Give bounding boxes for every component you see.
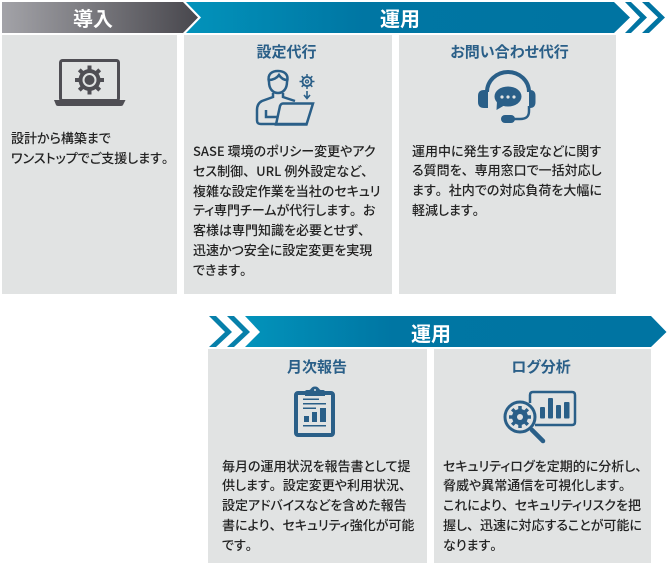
label: 運用 top: 運用 — [380, 3, 420, 32]
heading: 設定代行: 設定代行 — [256, 41, 316, 62]
icon: headset with speech bubble — [478, 70, 536, 123]
text: 設定代行 description: セス制御、URL 例外設定など、 — [193, 161, 374, 180]
text: 導入 description: ワンストップでご支援します。 — [11, 148, 175, 167]
panel: 設定代行 — [184, 35, 392, 294]
text: お問い合わせ代行 description: ます。社内での対応負荷を大幅に — [412, 180, 602, 199]
icon: magnifier with gear and chart — [504, 390, 576, 444]
icon: clipboard report — [294, 386, 335, 437]
heading: 月次報告: 月次報告 — [287, 356, 347, 377]
text: ログ分析 description: セキュリティログを定期的に分析し、 — [443, 456, 648, 474]
arrow: 運用 phase lower — [209, 316, 666, 347]
text: 月次報告 description: 設定アドバイスなどを含めた報告 — [222, 495, 407, 514]
text: 設定代行 description: できます。 — [193, 260, 253, 279]
text: 月次報告 description: 毎月の運用状況を報告書として提 — [222, 456, 411, 474]
text: 設定代行 description: SASE 環境のポリシー変更やアク — [193, 141, 376, 160]
text: ログ分析 description — [443, 456, 648, 554]
arrow: 導入 phase — [2, 2, 198, 33]
panel: 月次報告 — [208, 349, 427, 563]
icon: operator with laptop and gear — [256, 70, 315, 126]
label: 運用 lower: 運用 — [411, 318, 451, 347]
text: ログ分析 description: なります。 — [443, 535, 503, 554]
text: 設定代行 description: 迅速かつ安全に設定変更を実現 — [193, 240, 372, 259]
text: 設定代行 description: ティ専門チームが代行します。お — [193, 200, 375, 219]
text: 導入 description — [11, 128, 175, 167]
text: 設定代行 description: 客様は専門知識を必要とせず、 — [193, 220, 371, 239]
text: 導入 description: 設計から構築まで — [11, 128, 111, 147]
panel: お問い合わせ代行 — [399, 35, 616, 294]
text: 設定代行 description — [193, 141, 380, 279]
panel: ログ分析 — [434, 349, 651, 563]
text: 月次報告 description: 書により、セキュリティ強化が可能 — [222, 515, 414, 534]
text: 月次報告 description — [222, 456, 414, 554]
icon: laptop with gear — [54, 59, 126, 106]
arrow: 運用 phase top — [186, 2, 665, 33]
text: ログ分析 description: これにより、セキュリティリスクを把 — [443, 495, 641, 514]
text: 設定代行 description: 複雑な設定作業を当社のセキュリ — [193, 181, 380, 200]
text: ログ分析 description: 脅威や異常通信を可視化します。 — [443, 475, 632, 494]
text: お問い合わせ代行 description — [412, 140, 602, 219]
text: 月次報告 description: です。 — [222, 535, 259, 554]
text: ログ分析 description: 握し、迅速に対応することが可能に — [443, 515, 642, 534]
text: お問い合わせ代行 description: る質問を、専用窓口で一括対応し — [412, 160, 602, 179]
panel: 導入 — [2, 35, 177, 294]
text: お問い合わせ代行 description: 運用中に発生する設定などに関す — [412, 140, 601, 160]
heading: ログ分析: ログ分析 — [511, 356, 571, 377]
label: 導入: 導入 — [73, 3, 113, 32]
text: 月次報告 description: 供します。設定変更や利用状況、 — [222, 475, 412, 494]
text: お問い合わせ代行 description: 軽減します。 — [412, 200, 486, 219]
heading: お問い合わせ代行: お問い合わせ代行 — [450, 41, 569, 62]
